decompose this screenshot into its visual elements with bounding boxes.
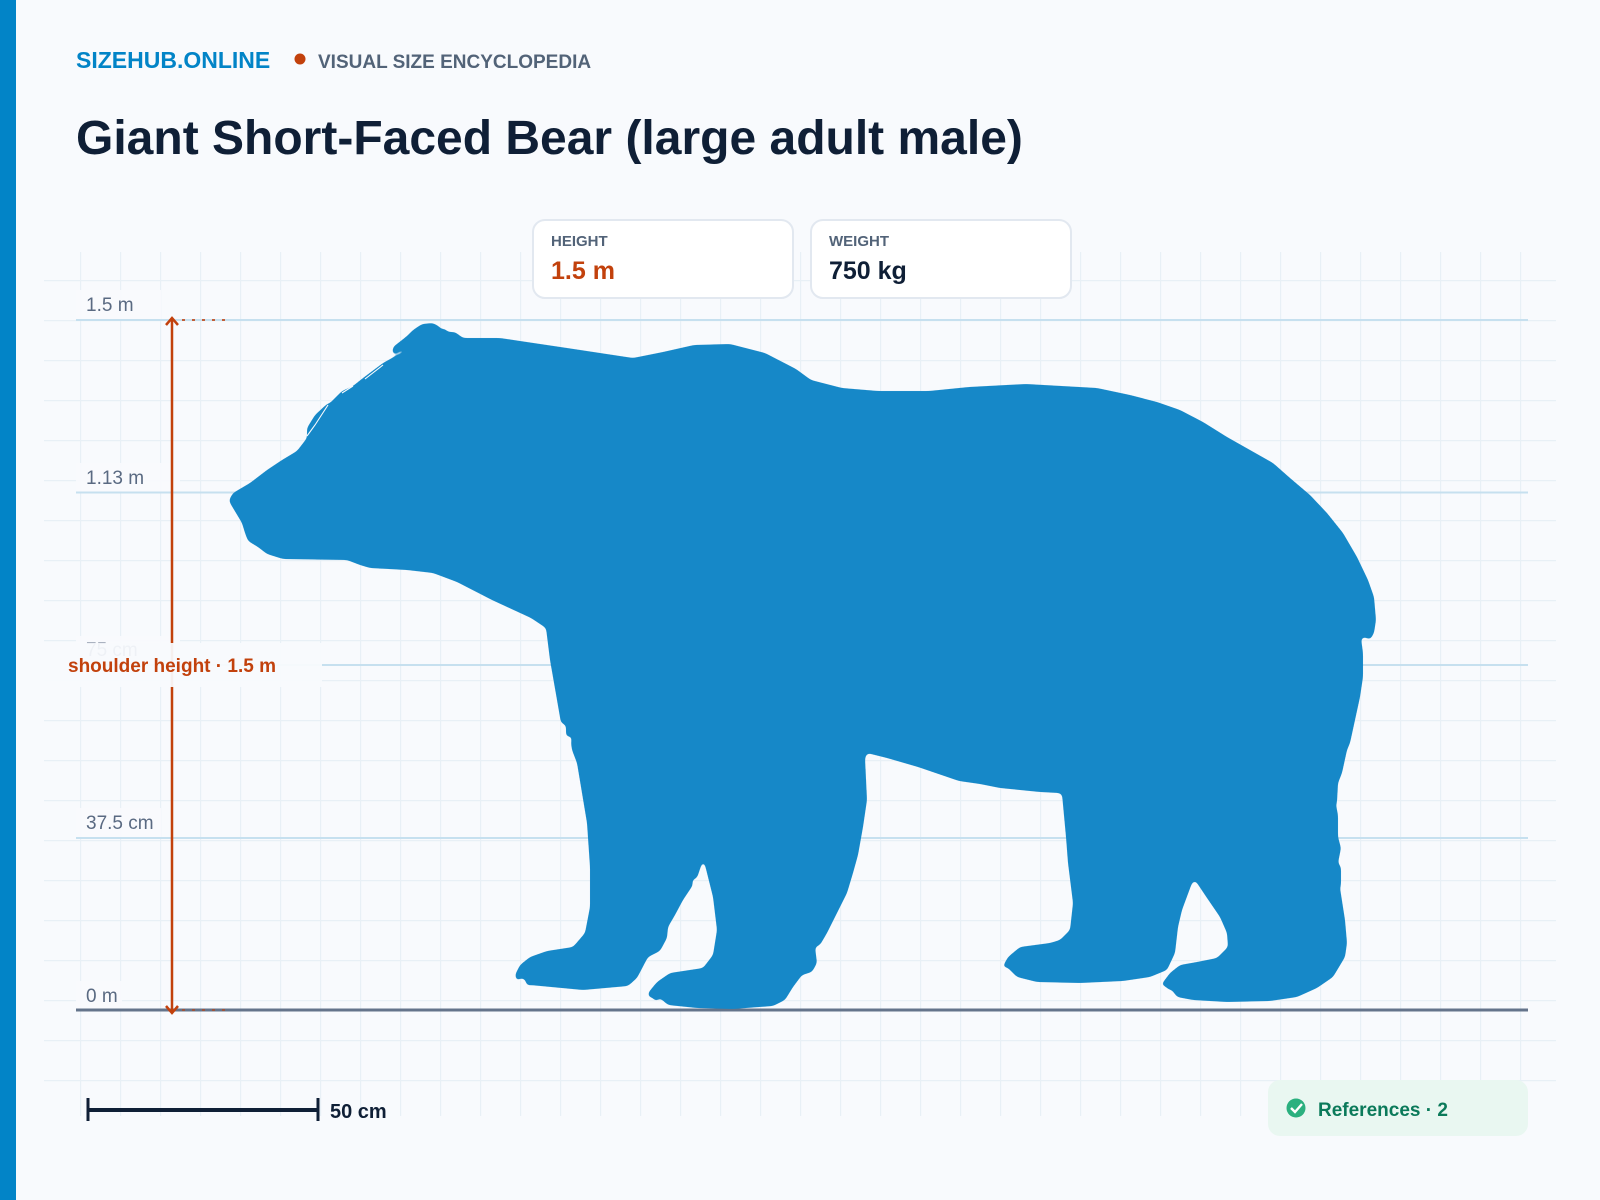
brand header: VISUAL SIZE ENCYCLOPEDIA: [318, 52, 591, 73]
height gridlines and labels: 1.13 m: [86, 468, 144, 489]
card: height: 1.5 m: [551, 257, 615, 285]
card: height: HEIGHT: [551, 233, 608, 250]
brand header: SIZEHUB.ONLINE: [76, 47, 270, 73]
scale bar: 50 cm: [330, 1101, 387, 1123]
references badge: References · 2: [1318, 1100, 1448, 1121]
card: weight: [811, 220, 1071, 298]
bear silhouette: [229, 323, 1376, 1009]
brand header: [76, 47, 591, 73]
scale bar: [88, 1098, 387, 1123]
height gridlines and labels: 75 cm: [86, 640, 138, 661]
ground line: [76, 1008, 1528, 1012]
height gridlines and labels: 37.5 cm: [86, 813, 154, 834]
accent bar: [0, 0, 16, 1200]
height gridlines and labels: [76, 290, 1528, 1010]
height gridlines and labels: 0 m: [86, 986, 118, 1007]
card: weight: WEIGHT: [829, 233, 889, 250]
shoulder height measure: [22, 318, 322, 1013]
card: weight: 750 kg: [829, 257, 907, 285]
title: Giant Short-Faced Bear (large adult male): [76, 112, 1023, 165]
references badge: [1268, 1080, 1528, 1136]
shoulder height measure: shoulder height · 1.5 m: [68, 656, 276, 677]
card: height: [533, 220, 793, 298]
height gridlines and labels: 1.5 m: [86, 295, 134, 316]
